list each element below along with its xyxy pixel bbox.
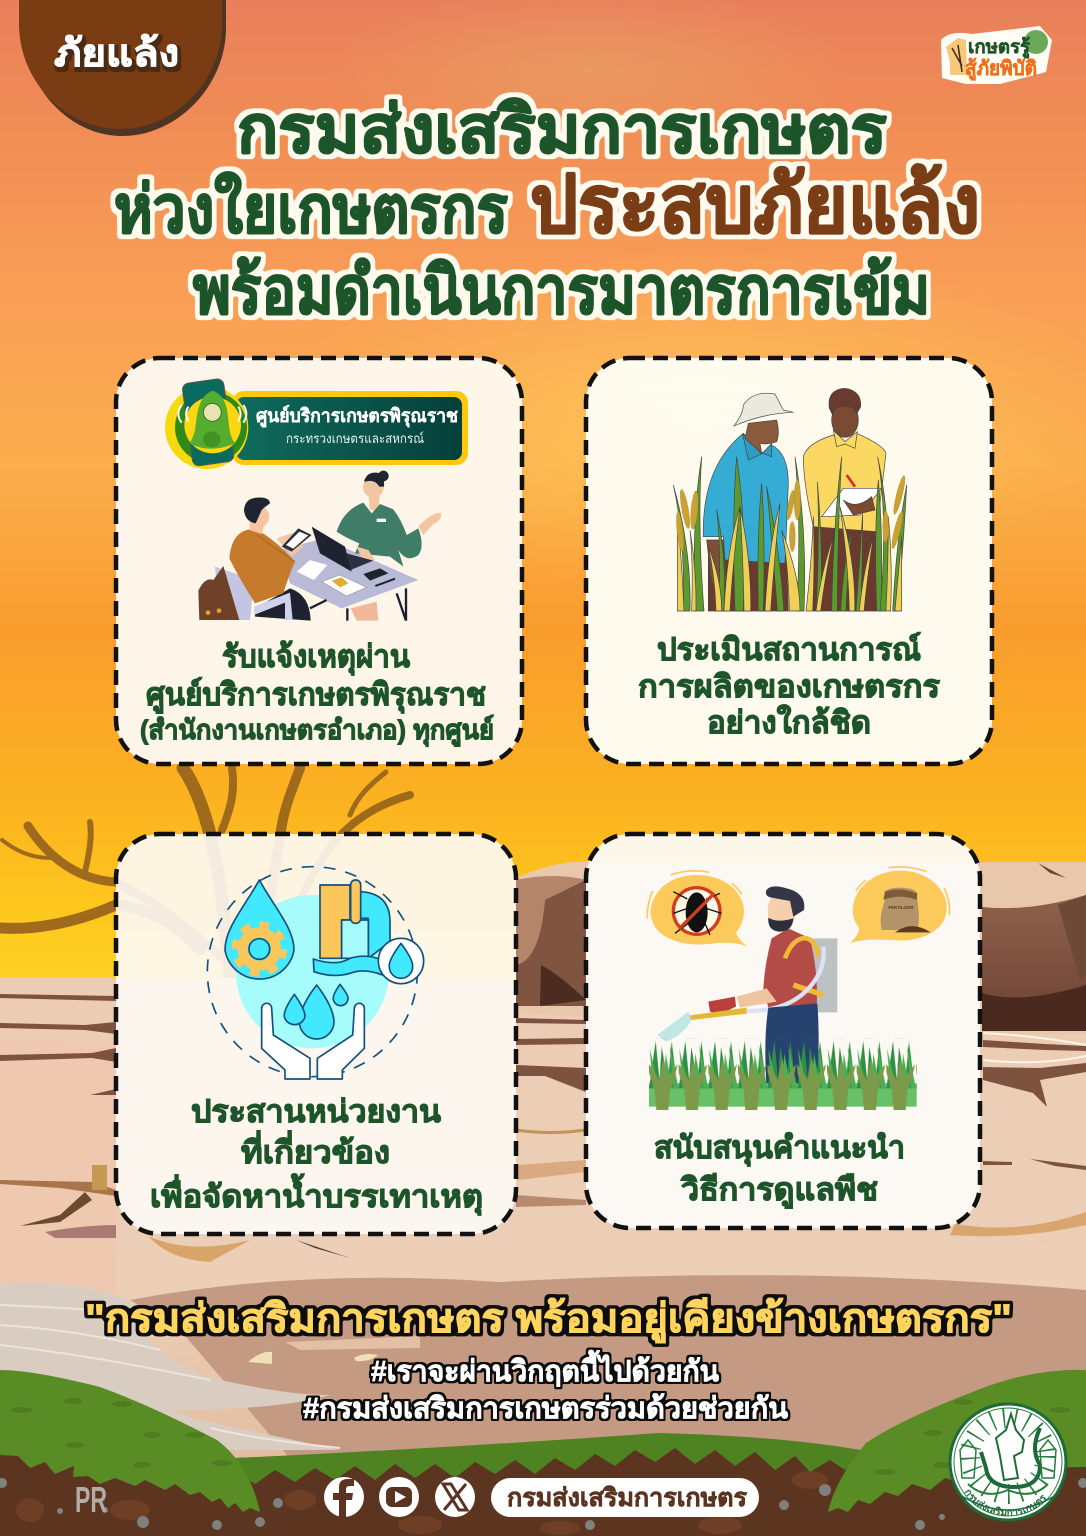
panel: assess production situation bbox=[586, 358, 992, 764]
hill: right bbox=[828, 1370, 1086, 1512]
background: sunset sky bbox=[0, 0, 1086, 1010]
hashtags: #กรมส่งเสริมการเกษตรร่วมด้วยช่วยกัน bbox=[303, 1393, 788, 1425]
caption: report via service centre: รับแจ้งเหตุผ่าน bbox=[222, 639, 410, 676]
illustration: farmer spraying crops bbox=[647, 867, 950, 1110]
badge: Pirunrajah service centre: กระทรวงเกษตรและสหกรณ์ bbox=[286, 431, 424, 446]
hashtags: #เราจะผ่านวิกฤตนี้ไปด้วยกัน bbox=[371, 1349, 719, 1388]
caption: coordinate water supply bbox=[150, 1094, 483, 1216]
caption: crop care advice: วิธีการดูแลพืช bbox=[680, 1172, 878, 1209]
page name pill bbox=[491, 1478, 759, 1517]
logo: farmers know, fight disasters: สู้ภัยพิบัติ bbox=[965, 57, 1037, 82]
caption: report via service centre bbox=[140, 639, 494, 747]
logo: farmers know, fight disasters bbox=[941, 26, 1052, 84]
logo: farmers know, fight disasters: เกษตรรู้ bbox=[968, 36, 1031, 59]
seal: Department of Agricultural Extension: กรมส่งเสริมการเกษตร bbox=[964, 1490, 1046, 1516]
caption: coordinate water supply: ประสานหน่วยงาน bbox=[191, 1094, 441, 1129]
caption: crop care advice: สนับสนุนคำแนะนำ bbox=[654, 1130, 905, 1167]
logo: PR mark: PR bbox=[75, 1479, 107, 1520]
tag: drought: ภัยแล้ง bbox=[54, 33, 179, 75]
caption: coordinate water supply: เพื่อจัดหาน้ำบรรเทาเหตุ bbox=[150, 1173, 483, 1216]
badge: Pirunrajah service centre bbox=[165, 378, 468, 469]
page name pill: กรมส่งเสริมการเกษตร bbox=[507, 1484, 748, 1512]
tag: drought bbox=[19, 0, 226, 136]
caption: assess production situation: อย่างใกล้ชิด bbox=[707, 704, 871, 740]
icon: YouTube bbox=[379, 1477, 419, 1517]
hill: left bbox=[0, 1370, 260, 1512]
seal: Department of Agricultural Extension bbox=[948, 1402, 1068, 1522]
caption: report via service centre: ศูนย์บริการเกษตรพิรุณราช bbox=[146, 677, 486, 714]
title: พร้อมดำเนินการมาตรการเข้ม bbox=[193, 253, 930, 327]
hashtags bbox=[303, 1349, 788, 1425]
background: cracked ground bbox=[0, 861, 1086, 1536]
title: กรมส่งเสริมการเกษตร bbox=[237, 92, 887, 166]
illustration: farmer meets officer bbox=[198, 471, 441, 621]
caption: assess production situation bbox=[638, 632, 940, 740]
quote: "กรมส่งเสริมการเกษตร พร้อมอยู่เคียงข้างเกษตรกร" bbox=[85, 1297, 1012, 1343]
illustration: water management icon bbox=[207, 867, 424, 1079]
icon: X bbox=[435, 1477, 475, 1517]
caption: crop care advice bbox=[654, 1130, 905, 1209]
illustration: farmer spraying crops: FERTILIZER bbox=[888, 905, 914, 911]
caption: assess production situation: การผลิตของเกษตรกร bbox=[638, 669, 940, 704]
panel: coordinate water supply bbox=[116, 834, 516, 1234]
caption: report via service centre: (สำนักงานเกษตรอำเภอ) ทุกศูนย์ bbox=[140, 714, 494, 747]
caption: assess production situation: ประเมินสถานการณ์ bbox=[657, 632, 921, 667]
panel: crop care advice bbox=[586, 834, 980, 1228]
badge: Pirunrajah service centre: ศูนย์บริการเกษตรพิรุณราช bbox=[256, 405, 458, 428]
title: ประสบภัยแล้ง bbox=[530, 160, 980, 249]
panel: report via service centre bbox=[116, 358, 522, 764]
icon: Facebook bbox=[324, 1477, 364, 1517]
background: soil strip bbox=[0, 1433, 1086, 1536]
title: ห่วงใยเกษตรกร bbox=[114, 170, 508, 246]
title bbox=[114, 92, 980, 327]
illustration: two farmers in a rice field bbox=[673, 388, 907, 611]
background: dead tree bbox=[0, 768, 410, 1130]
caption: coordinate water supply: ที่เกี่ยวข้อง bbox=[241, 1130, 390, 1170]
